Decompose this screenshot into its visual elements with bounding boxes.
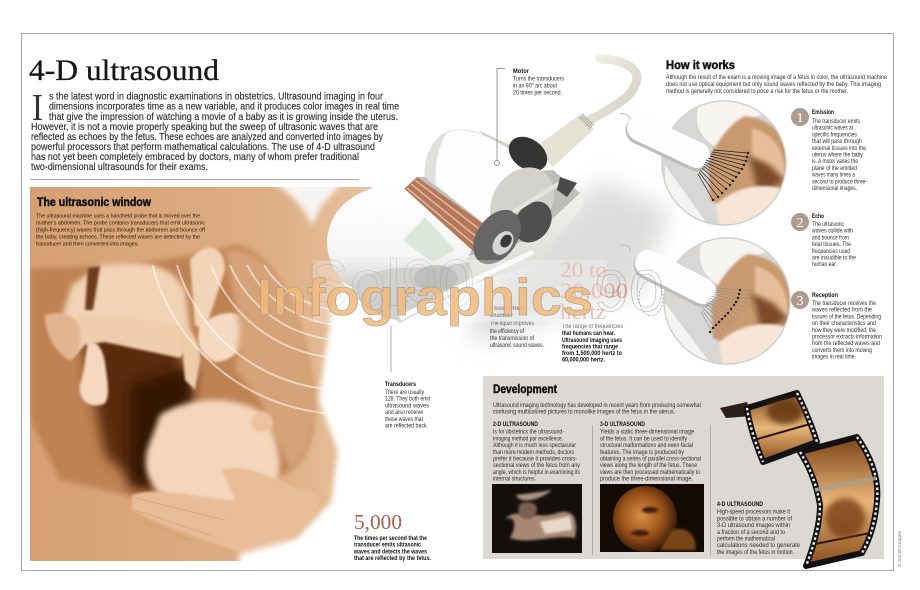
column: 3-D ultrasound: produce the three-dimensional image. [600,477,693,483]
callout: range of frequencies: frequencies that range [562,344,619,350]
callout: transducers: There are usually [385,390,424,396]
callout: fluid-filled chamber: the efficiency of [490,329,524,335]
text: how it works: method is generally not considered to pose a risk for the fetus or the mother. [666,89,848,95]
callout: motor [494,68,564,166]
big number: 20 to 20,000 hertz [560,257,628,324]
column: 3-D ultrasound [600,422,701,483]
column: 4-D ultrasound: 3-D ultrasound images within [717,523,790,529]
diagram: echo and reception [663,237,791,365]
callout: transducers: these waves that [385,417,423,423]
text: ultrasonic window: mother's abdomen. The probe contains transducers that emit ultrasonic [36,220,205,226]
intro text block: that give the impression of watching a movie of a baby as it is growing inside the uterus. [49,111,398,123]
callout: fluid-filled chamber: chamber [490,313,514,319]
step 3: reception: The transducer receives the [812,301,877,307]
intro text block [31,87,399,173]
callout: motor: in an 80° arc about [513,84,557,90]
step 2: echo: are inaudible to the [812,256,857,262]
ripples [152,265,345,414]
step 3: reception: converts them into moving [812,348,872,354]
panel: development [483,376,884,559]
text: how it works: does not use optical equipment but only sound waves reflected by the baby. This imaging [666,82,881,88]
callout: range of frequencies: from 1,500,000 hertz to [562,351,622,357]
step 1: emission: The transducer emits [812,119,860,125]
diagram: emission [660,100,790,230]
step 2: echo: 2 [796,216,804,231]
step 2: echo: fetal tissues. The [812,242,852,248]
callout: transducers: Transducers [385,382,417,388]
supporting hand [132,468,320,552]
probe head: echo and reception [620,245,703,316]
text: ultrasonic window: transducer and then converted into images. [36,242,139,248]
step 1: emission: external tissues into the [812,146,867,152]
arrows: reflected waves [701,288,751,338]
step 1: emission: ultrasonic waves at [812,126,853,132]
step 3: reception: 3 [796,294,804,309]
step 3: reception: waves reflected from the [811,308,873,314]
callout: fluid-filled chamber: the transmission of [490,336,534,342]
baby body [60,263,192,345]
intro text block: I [32,87,43,129]
intro text block: s the latest word in diagnostic examinations in obstetrics. Ultrasound imaging in four [49,90,383,102]
step 2: echo: The ultrasonic [812,222,844,228]
intro text block: two-dimensional ultrasounds for their exams. [31,161,208,173]
step 2: echo: human ear. [812,262,837,268]
column: 4-D ultrasound: a fraction of a second and to [717,530,786,536]
step 3: reception: on their characteristics and [812,321,876,327]
step 1: emission: is. A motor varies the [812,159,859,165]
watermark: Infographics [257,269,593,327]
column: 4-D ultrasound [717,502,801,556]
callout: motor: 20 times per second. [513,90,562,96]
transducer probe illustration [327,59,670,345]
column: 2-D ultrasound: sectional views of the fetus from any [493,463,580,469]
text: development intro [493,403,701,416]
column: 4-D ultrasound: calculations needed to generate [717,543,801,549]
column: 2-D ultrasound: imaging method par excellence. [493,436,563,442]
column: 4-D ultrasound: 4-D ULTRASOUND [717,502,764,508]
arrows: emitted waves [698,150,748,200]
callout: range of frequencies: 60,000,000 hertz. [562,358,605,364]
column: 3-D ultrasound: structural malformations and even facial [600,443,693,449]
column: 4-D ultrasound: the images of the fetus in motion. [717,550,794,556]
text: how it works: Although the result of the exam is a moving image of a fetus in color, the ultrasound machine [666,75,888,81]
step 3: reception: from the reflected waves and [812,341,880,347]
callout: transducers [385,326,430,430]
intro text block: reflected as echoes by the fetus. These echoes are analyzed and converted into images by [31,131,384,143]
callout: fluid-filled chamber: Fluid-filled [490,306,524,312]
panel: ultrasonic window photo [30,180,375,561]
intro text block: However, it is not a movie properly speaking but the sweep of ultrasonic waves that are [31,121,378,133]
right belly [225,250,316,470]
intro text block: has not yet been completely embraced by doctors, many of whom prefer traditional [31,151,359,163]
watermark: 90 [594,259,664,324]
lower tray [352,193,583,323]
big number: 5,000: The times per second that the [354,536,428,542]
heading: the ultrasonic window: The ultrasonic window [37,197,151,209]
text: ultrasonic window: (high-frequency) waves that pass through the abdomen and bounce off [36,228,205,234]
front casing [327,182,472,287]
step 2: echo: Echo [812,214,824,220]
copper transducers [403,177,485,252]
heading: how it works: How it works [666,60,735,72]
callout: range of frequencies: that humans can hear. [562,331,615,337]
callout: fluid-filled chamber [490,306,544,349]
big number: 5,000: transducer emits ultrasonic [354,543,422,549]
step 3: reception: tissues of the fetus. Depending [812,314,881,320]
title: 4-D ultrasound [29,54,219,87]
step 2: echo: frequencies used [812,249,850,255]
text: how it works [666,75,888,95]
big number: 20 to 20,000 hertz: hertz [560,299,606,324]
step 1: emission: that will pass through [812,139,862,145]
heading: development: Development [493,384,557,396]
column: 3-D ultrasound: 3-D ULTRASOUND [600,422,646,428]
callout: range of frequencies [562,324,623,364]
step 3: reception: images in real time. [812,355,856,361]
step 1: emission: Emission [812,110,834,116]
image credit: © Sol 90 Images [896,530,902,567]
white cylinder [425,130,541,226]
callout: motor: Motor [513,69,530,75]
column: 2-D ultrasound [493,422,580,483]
callout: range of frequencies: The range of frequencies [562,324,623,330]
column: 2-D ultrasound: angle, which is helpful in examining its [493,470,580,476]
step 1: emission: dimensional images. [812,186,857,192]
column: 3-D ultrasound: features. The image is produced by [600,450,684,456]
probe head: emission [620,114,697,157]
back rail [478,130,540,172]
step 2: echo: and bounce from [812,235,849,241]
step 3: reception: how they were modified, the [812,328,877,334]
text: ultrasonic window: The ultrasound machine uses a handheld probe that is moved over the [36,214,200,220]
step 1: emission: second to produce three- [812,179,867,185]
step 3: reception [791,291,882,361]
big number: 5,000: that are reflected by the fetus. [354,556,431,562]
image: 2-D scan [492,484,582,553]
callout: motor: Turns the transducers [513,76,564,82]
text: development intro: confusing multicolored pictures to monolike images of the fetus in the uterus. [493,410,675,416]
step 1: emission: specific frequencies [812,132,857,138]
callout: transducers: ultrasound waves [385,403,429,409]
big number: 5,000 [353,510,431,562]
callout: transducers: and also receive [385,410,424,416]
step 1: emission [791,108,867,192]
arm and upper foot [190,248,225,330]
column: 2-D ultrasound: than more modern methods, doctors [493,450,574,456]
column: 2-D ultrasound: internal structures. [493,477,536,483]
watermark: Sol90 [305,246,475,320]
tray interior [403,170,580,262]
step 3: reception: processor extracts information [812,334,882,340]
column: 3-D ultrasound: Yields a static three-dimensional image [600,430,695,436]
disks [477,155,567,249]
column: 2-D ultrasound: 2-D ULTRASOUND [493,422,539,428]
column: 2-D ultrasound: prefer it because it provides cross- [493,456,577,462]
head [146,400,279,510]
cable [585,59,637,123]
womb interior [30,245,313,500]
text: ultrasonic window: the baby, creating echoes. These reflected waves are detected by the [36,234,200,240]
column: 4-D ultrasound: possible to obtain a number of [717,516,792,522]
big number: 20 to 20,000 hertz: 20 to [560,257,607,282]
callout: transducers: 128. They both emit [385,397,430,403]
watermark [257,246,664,327]
image: 3-D scan [600,484,704,552]
soft right edge of photo [240,262,372,561]
column: 4-D ultrasound: perform the mathematical [717,536,775,542]
column: 3-D ultrasound: views along the length of the fetus. These [600,463,698,469]
column: 3-D ultrasound: obtaining a series of parallel cross-sectional [600,456,701,462]
intro text block: dimensions incorporates time as a new variable, and it produces color images in real time [49,101,399,113]
step 3: reception: Reception [812,293,838,299]
column: 4-D ultrasound: High-speed processors make it [717,510,790,516]
text: development intro: Ultrasound imaging technology has developed in recent years from producing somewhat [493,403,701,409]
text: ultrasonic window [36,214,205,248]
intro text block: powerful processors that perform mathematical calculations. The use of 4-D ultrasound [31,141,375,153]
column: 2-D ultrasound: Is for obstetrics the ultrasound- [493,430,564,436]
column: 3-D ultrasound: of the fetus. It can be used to identify [600,436,687,442]
column: 3-D ultrasound: views are then processed mathematically to [600,470,701,476]
callout: range of frequencies: Ultrasound imaging uses [562,338,623,344]
column: 2-D ultrasound: Although it is much less spectacular [493,443,576,449]
step 1: emission: plane of the emitted [812,166,857,172]
callout: transducers: are reflected back. [385,424,428,430]
motor cap [502,130,554,178]
rod and bracket [513,181,563,212]
callout: fluid-filled chamber: ultrasonic sound waves. [490,343,544,349]
callout: fluid-filled chamber: The liquid improves [490,321,534,327]
step 1: emission: uterus where the baby [812,152,863,158]
big number: 5,000: 5,000 [354,510,402,534]
step 2: echo: waves collide with [811,229,853,235]
step 2: echo [791,213,857,268]
big number: 5,000: waves and detects the waves [353,549,428,555]
step 1: emission: 1 [796,111,804,126]
film strip [720,393,877,566]
big number: 20 to 20,000 hertz: 20,000 [560,278,628,303]
step 1: emission: waves many times a [811,173,856,179]
